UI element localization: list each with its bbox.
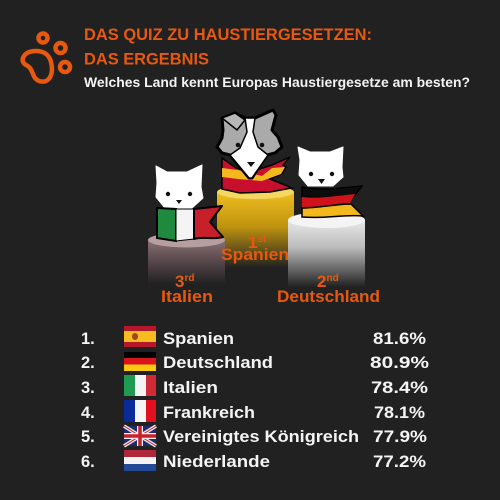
label: first place: 1: [248, 233, 257, 252]
label: second place: 2: [317, 272, 326, 291]
podium: second place: [288, 212, 365, 287]
row 3: Italien: [163, 379, 218, 397]
label: second place: [277, 272, 380, 306]
label: first place: [221, 233, 289, 264]
ranking table: [81, 326, 429, 471]
row 6: [81, 450, 426, 471]
label: first place: Spanien: [221, 246, 289, 264]
row 5: 5.: [81, 428, 95, 446]
row 3: 78.4%: [371, 379, 428, 397]
row 6: 77.2%: [373, 453, 426, 471]
row 2: 2.: [81, 354, 95, 372]
dog with Spanish flag: [217, 110, 292, 193]
label: second place: Deutschland: [277, 288, 380, 306]
label: third place: 3: [175, 272, 184, 291]
podium: first place: [217, 185, 294, 268]
row 1: Spanien: [163, 330, 234, 348]
title: DAS QUIZ ZU HAUSTIERGESETZEN:: [84, 25, 372, 44]
podium: third place: [148, 232, 225, 284]
row 4: 4.: [81, 404, 95, 422]
cat with German flag: [298, 147, 363, 217]
title: DAS ERGEBNIS: [84, 50, 209, 68]
label: second place: nd: [326, 273, 339, 284]
row 3: 3.: [81, 379, 95, 397]
label: third place: rd: [184, 273, 194, 284]
row 4: 78.1%: [374, 404, 425, 422]
row 1: 1.: [81, 330, 95, 348]
row 1: [81, 326, 426, 348]
row 3: [81, 375, 428, 397]
row 1: 81.6%: [373, 330, 426, 348]
row 5: 77.9%: [373, 428, 427, 446]
row 2: [81, 352, 429, 372]
row 4: Frankreich: [163, 404, 255, 422]
label: third place: Italien: [161, 288, 213, 306]
row 5: Vereinigtes Königreich: [163, 428, 359, 446]
label: first place: st: [257, 234, 267, 245]
label: third place: [161, 272, 213, 306]
row 4: [81, 400, 425, 422]
title: [84, 25, 372, 68]
row 6: Niederlande: [163, 453, 270, 471]
row 5: [81, 426, 427, 446]
row 6: 6.: [81, 453, 95, 471]
cat with Italian flag: [156, 165, 223, 241]
row 2: Deutschland: [163, 354, 273, 372]
icon: paw logo: [23, 34, 70, 82]
subtitle: Welches Land kennt Europas Haustiergesetze am besten?: [84, 74, 470, 90]
row 2: 80.9%: [370, 354, 429, 372]
